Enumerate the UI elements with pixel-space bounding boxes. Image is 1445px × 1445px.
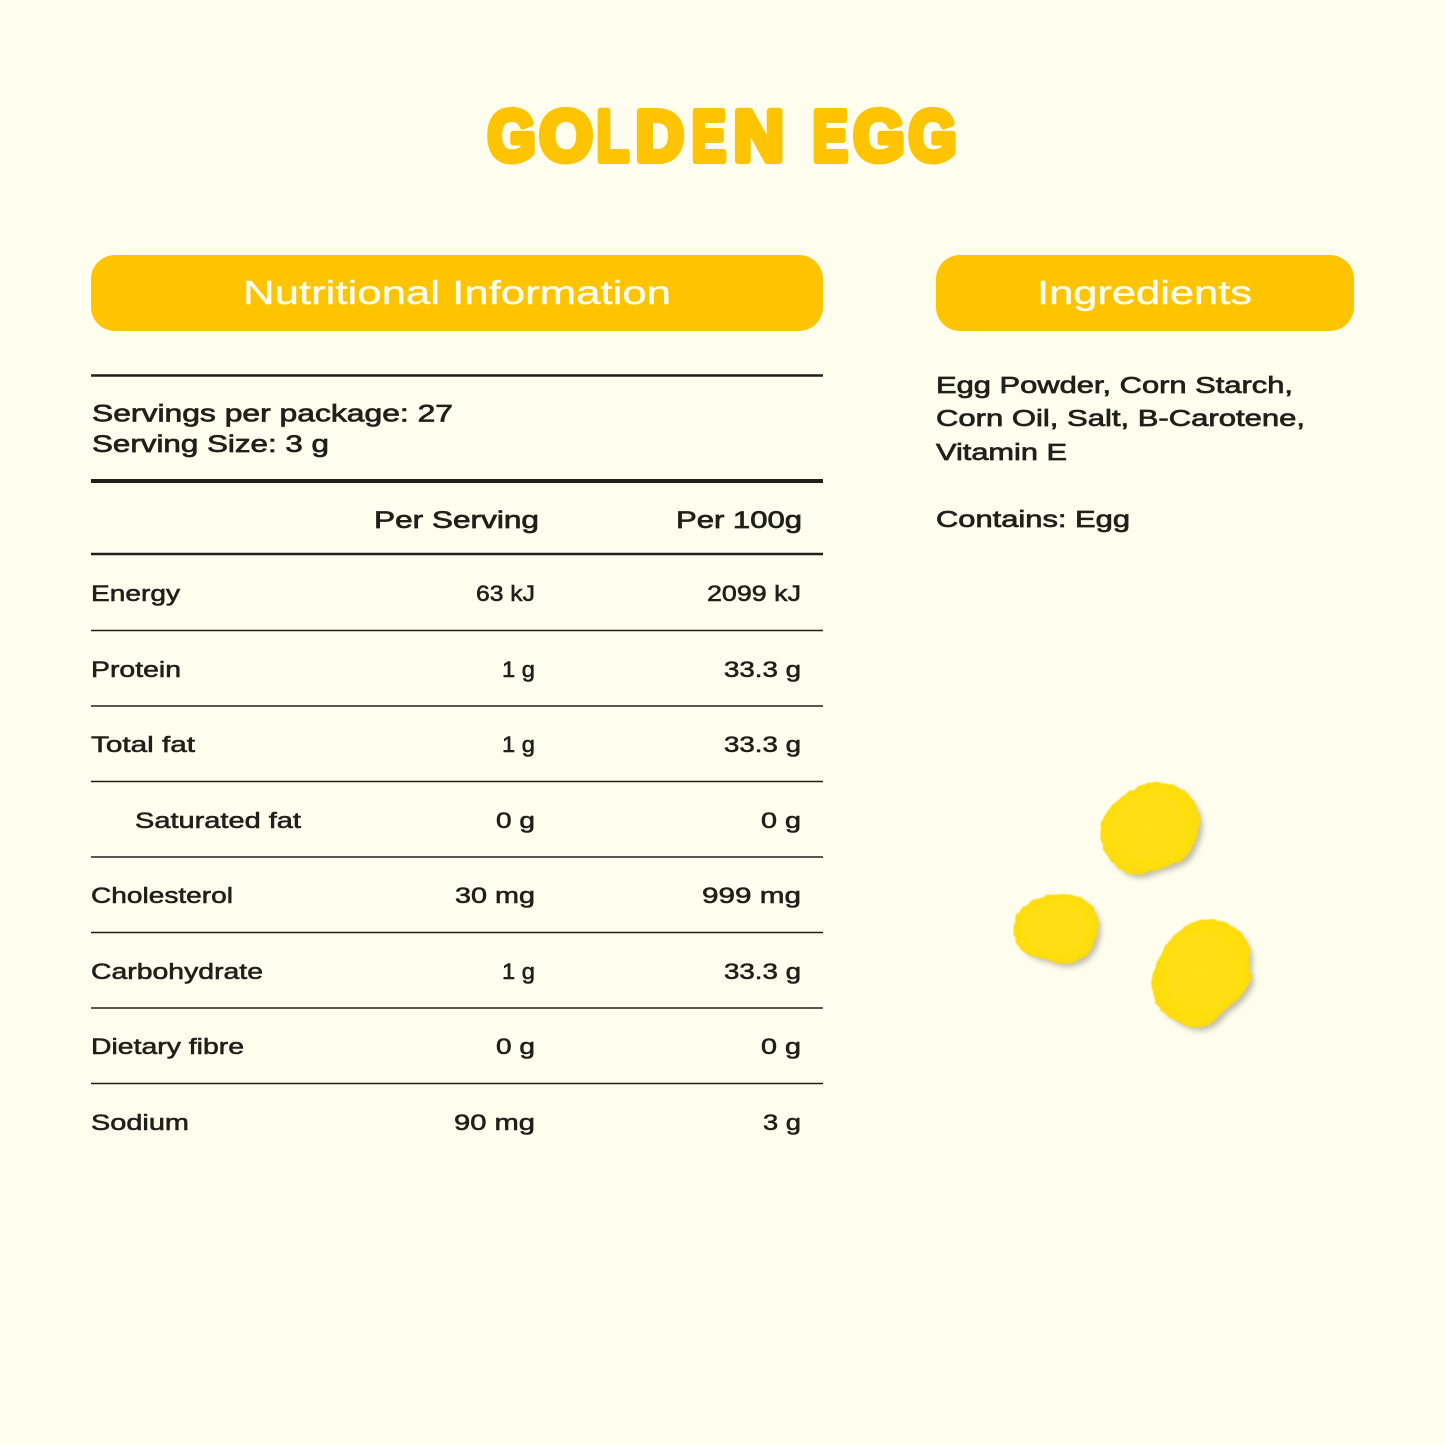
panel header: ingredients: Ingredients [1037, 274, 1252, 311]
row: total fat [91, 732, 801, 757]
row: cholesterol: 999 mg [702, 883, 801, 908]
row: sodium: Sodium [91, 1110, 189, 1135]
title: G [488, 98, 535, 176]
row: dietary fibre [91, 1034, 801, 1059]
image: golden egg puffs [1014, 784, 1254, 1031]
egg puff: right [1153, 921, 1254, 1031]
panel: nutrition table [91, 376, 823, 1135]
ingredients list: Contains: Egg [936, 506, 1130, 532]
row: carbohydrate: Carbohydrate [91, 959, 263, 984]
panel header: ingredients [936, 255, 1354, 331]
row: dietary fibre: 0 g [761, 1034, 801, 1059]
row: cholesterol: Cholesterol [91, 883, 233, 908]
ingredients list: Egg Powder, Corn Starch, [936, 372, 1293, 398]
egg puff: left [1014, 896, 1101, 967]
row: protein: 1 g [502, 657, 535, 682]
title: D [636, 98, 684, 176]
row: saturated fat: Saturated fat [135, 808, 301, 833]
row: saturated fat [135, 808, 801, 833]
row: dietary fibre: 0 g [496, 1034, 535, 1059]
ingredients list [936, 372, 1305, 532]
column headings: Per Serving [374, 507, 539, 534]
column headings [374, 507, 802, 534]
row: carbohydrate: 33.3 g [724, 959, 801, 984]
egg puff: top [1102, 784, 1203, 878]
title: G [909, 98, 956, 176]
row: total fat: Total fat [91, 732, 195, 757]
row: sodium: 90 mg [454, 1110, 535, 1135]
ingredients list: Corn Oil, Salt, B-Carotene, [936, 405, 1305, 431]
row: carbohydrate [91, 959, 801, 984]
column headings: Per 100g [676, 507, 802, 534]
panel header: nutritional information [91, 255, 823, 331]
row: energy: 2099 kJ [707, 581, 801, 606]
row: protein [91, 657, 801, 682]
row: energy: 63 kJ [476, 581, 535, 606]
row: cholesterol: 30 mg [455, 883, 535, 908]
title: L [597, 98, 629, 176]
serving information: Servings per package: 27 [92, 400, 453, 428]
row: total fat: 33.3 g [724, 732, 801, 757]
ingredients list: Vitamin E [936, 439, 1067, 465]
row: protein: 33.3 g [724, 657, 801, 682]
title: E [692, 98, 726, 176]
row: energy: Energy [91, 581, 180, 606]
row: protein: Protein [91, 657, 181, 682]
row: saturated fat: 0 g [761, 808, 801, 833]
row: carbohydrate: 1 g [502, 959, 535, 984]
row: sodium [91, 1110, 801, 1135]
title: N [734, 98, 784, 176]
title: O [540, 98, 592, 176]
row: cholesterol [91, 883, 801, 908]
title: E [813, 98, 848, 176]
row: sodium: 3 g [763, 1110, 801, 1135]
row: saturated fat: 0 g [496, 808, 535, 833]
row: total fat: 1 g [502, 732, 535, 757]
panel header: nutritional information: Nutritional Information [243, 274, 671, 311]
row: dietary fibre: Dietary fibre [91, 1034, 244, 1059]
title: G [854, 98, 904, 176]
serving information: Serving Size: 3 g [92, 431, 329, 458]
row: energy [91, 581, 801, 606]
serving information [92, 400, 453, 458]
